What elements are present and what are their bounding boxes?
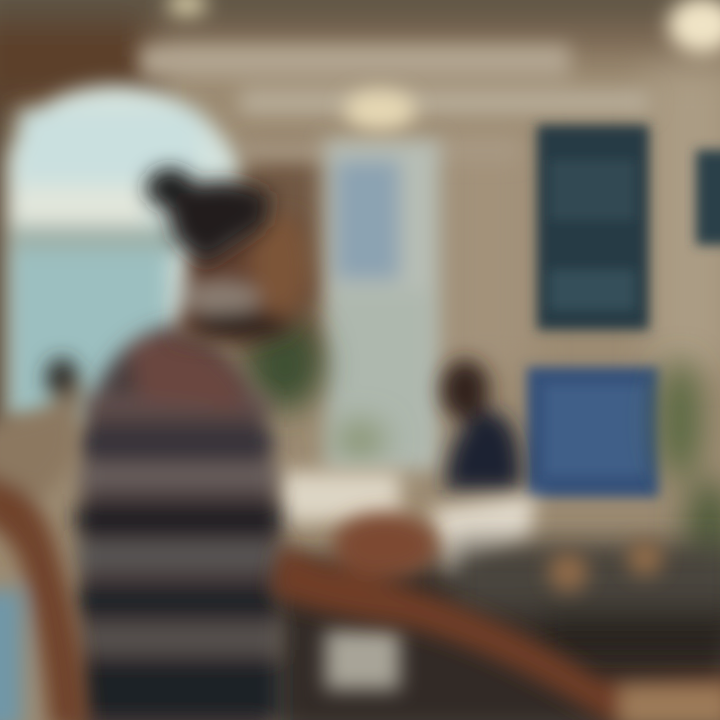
man [75,168,312,720]
right edge board [696,150,720,245]
man neck and face [175,215,312,345]
foreground left person arm [0,358,90,720]
pendant lamps [167,0,720,130]
blue screen [527,367,659,497]
table and white papers [280,472,535,690]
arched window with sea view [8,85,238,420]
man hair with bun [146,168,270,265]
green plants [247,320,720,580]
man shirt with stripes [75,325,285,720]
lower right tabletop with cups [450,545,720,650]
chalkboard menu [537,125,649,330]
background woman [441,360,521,490]
ceiling beams [140,45,650,160]
white column with blue panel [325,140,440,470]
man forearm reaching across table [270,513,720,720]
